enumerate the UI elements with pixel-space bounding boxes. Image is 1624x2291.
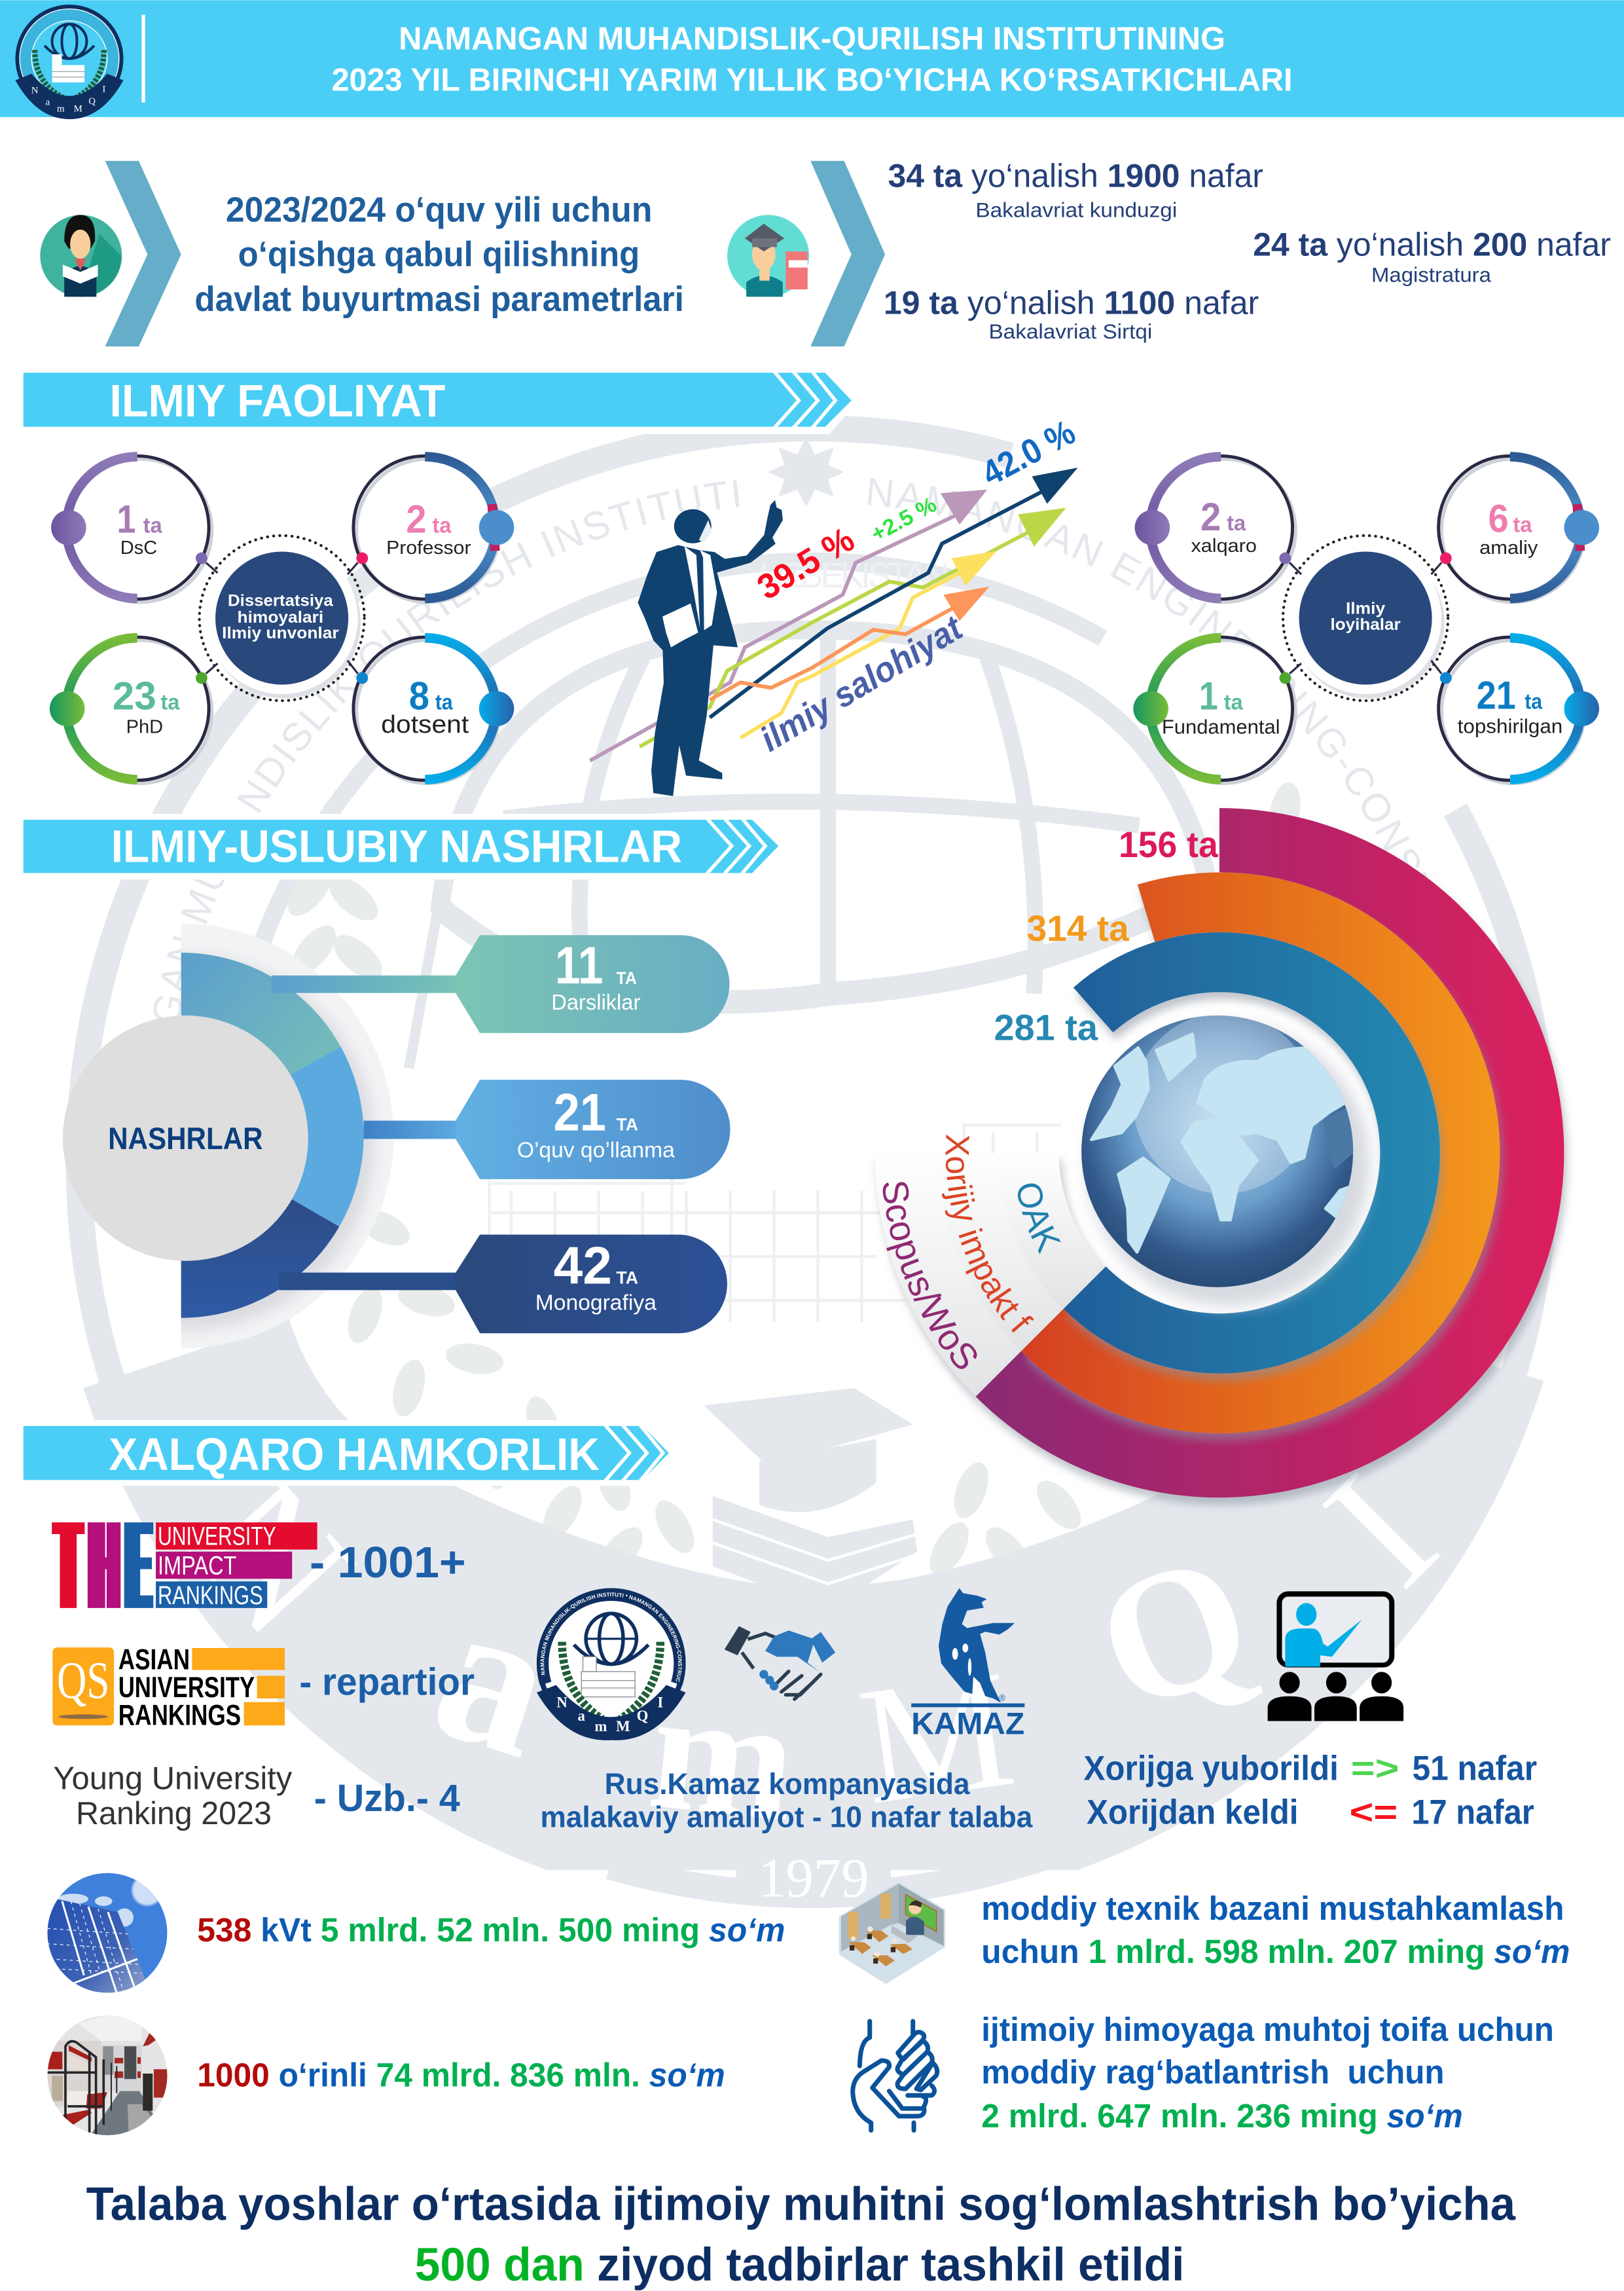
ring: dotsent: ta [435,691,453,715]
text: social support funding: ijtimoiy himoyaga muhtoj toifa uchun [981,2011,1554,2048]
photo: solar panel [46,1871,170,1997]
arc labels [882,1134,1061,1369]
ring: Professor [348,456,514,602]
logo: QS Asian rankings [52,1644,285,1731]
icon: presenter and audience [1268,1594,1403,1721]
ring: Xorijiy impakt [1021,872,1500,1433]
text: dormitory funding: 1000 o‘rinli 74 mlrd. 836 mln. so‘m [197,2056,725,2093]
text: social support funding: 2 mlrd. 647 mln. 236 ming so‘m [981,2097,1463,2135]
panel: growth chart with businessman [590,413,1081,796]
center disc: NASHRLAR: NASHRLAR [108,1122,263,1156]
logo: NamMQI emblem: I [657,1695,663,1711]
watermark: institute emblem: M [850,1635,1024,1840]
logo: NamMQI emblem: m [594,1718,607,1734]
value: repartior: - repartior [299,1660,475,1703]
ring: xalqaro [1135,456,1301,602]
ring: PhD: 23 [113,674,156,718]
header logo: Q [88,96,96,107]
ring: Professor: Professor [386,538,471,559]
hub: Ilmiy loyihalar: loyihalar [1331,616,1401,634]
header title: NAMANGAN MUHANDISLIK-QURILISH INSTITUTINING [399,21,1225,56]
section banner: XALQARO HAMKORLIK: XALQARO HAMKORLIK [109,1429,600,1480]
ring: Professor: 2 [406,496,426,541]
arc labels: Scopus/WoS [882,1182,977,1369]
pill: O'quv qo'llanma: TA [617,1114,638,1134]
label: 42.0 %: 42.0 % [976,413,1081,494]
logo: NamMQI emblem: NAMANGAN MUHANDISLIK-QURILISH INSTITUTI * NAMANGAN ENGINEERING-CONSTRUCTION INSTITUTE [541,1592,682,1682]
ring: PhD: PhD [126,716,163,737]
white disc [1059,992,1380,1313]
pill: O'quv qo'llanma: 21 [554,1083,606,1142]
text: solar funding: 538 kVt 5 mlrd. 52 mln. 500 ming so‘m [197,1911,785,1949]
section banner: ILMIY-USLUBIY NASHRLAR [18,814,785,879]
logo: NamMQI emblem: M [616,1718,630,1734]
ring: Fundamental: Fundamental [1162,716,1280,738]
hub: Dissertatsiya: Ilmiy unvonlar [222,625,339,642]
section banner: XALQARO HAMKORLIK [18,1420,676,1486]
text: material base funding: uchun 1 mlrd. 598 mln. 207 ming so‘m [981,1933,1570,1970]
ring: DsC: DsC [120,538,157,559]
center disc: NASHRLAR [63,1016,308,1261]
watermark: institute emblem: m [642,1652,804,1858]
ring: topshirilgan [1431,637,1599,783]
ring: dotsent [348,637,514,783]
ring: xalqaro: 2 [1200,494,1221,539]
value labels [994,824,1219,1048]
ring: Scopus/WoS [976,808,1564,1497]
text: exchange figures: Xorijdan keldi [1087,1793,1298,1831]
ring: amaliy: 6 [1489,496,1509,540]
panel: radial chart of publications [873,808,1572,1509]
header title: 2023 YIL BIRINCHI YARIM YILLIK BO‘YICHA KO‘RSATKICHLARI [331,63,1293,98]
ring segment: Monografiya [181,1135,339,1318]
pale label bands [875,1153,1106,1397]
ring: dotsent: dotsent [381,711,469,739]
admission heading: 2023/2024 o‘quv yili uchun [226,191,652,229]
watermark: institute emblem: UZBEKISTAN [759,557,949,595]
admission figures: Bakalavriat Sirtqi [988,320,1152,343]
icon: graduate [727,215,809,297]
ring: Fundamental [1133,637,1301,783]
admission figures: 19 ta yo‘nalish 1100 nafar [884,284,1259,321]
logo: THE impact rankings [52,1522,317,1610]
admission figures: Magistratura [1371,264,1492,287]
ring: dotsent: 8 [409,674,429,718]
section banner: ILMIY FAOLIYAT [18,367,859,434]
panel: scientific projects [1133,456,1599,783]
hub: Ilmiy loyihalar [1283,536,1448,701]
photo: dormitory room [46,2013,170,2139]
logo: THE impact rankings: IMPACT [158,1550,236,1580]
globe [1081,1012,1370,1306]
pill: Monografiya: 42 [554,1236,612,1295]
admission row [40,157,1611,346]
logo: THE impact rankings: RANKINGS [158,1581,263,1610]
text: exchange figures: 17 nafar [1411,1793,1534,1831]
section banner: ILMIY FAOLIYAT: ILMIY FAOLIYAT [109,375,445,426]
panel: dissertations and titles [50,456,514,783]
logo: KAMAZ: ® [999,1693,1005,1702]
text: Young University Ranking: Young University [53,1761,293,1797]
pill: Darsliklar: Darsliklar [551,991,640,1015]
admission figures: Bakalavriat kunduzgi [975,199,1177,222]
admission heading [194,191,684,319]
logo: QS Asian rankings: UNIVERSITY [118,1672,255,1704]
hub: Dissertatsiya [200,536,365,701]
hub: Ilmiy loyihalar: Ilmiy [1346,600,1386,617]
icon: student reading [40,215,122,297]
pill: O'quv qo'llanma: O’quv qo’llanma [517,1138,675,1162]
text: material base funding: moddiy texnik bazani mustahkamlash [981,1890,1564,1927]
footer statement [86,2178,1516,2291]
admission figures: 24 ta yo‘nalish 200 nafar [1253,227,1611,263]
header bar [0,0,1624,119]
businessman silhouette [638,500,783,796]
header logo: a [46,98,50,108]
text: Rus.Kamaz internship [541,1767,1033,1833]
admission heading: o‘qishga qabul qilishning [238,235,640,274]
ring: amaliy: ta [1513,513,1532,537]
hub: Dissertatsiya: Dissertatsiya [228,592,333,610]
ring segment: O'quv qo'llanma [181,1047,364,1226]
value: 1001+: - 1001+ [310,1538,466,1587]
ring: Fundamental: 1 [1199,674,1218,718]
text: Rus.Kamaz internship: malakaviy amaliyot - 10 nafar talaba [541,1800,1033,1833]
admission figures: 34 ta yo‘nalish 1900 nafar [888,157,1263,194]
ring: Professor: ta [432,513,452,538]
pill: Darsliklar: TA [617,968,637,988]
text: exchange figures [1083,1750,1537,1831]
logo: THE impact rankings: UNIVERSITY [158,1522,276,1551]
footer statement: 500 dan ziyod tadbirlar tashkil etildi [415,2239,1184,2291]
watermark: institute emblem: I [1288,1437,1473,1622]
arc labels: OAK [1018,1184,1061,1255]
logo: NamMQI emblem [537,1588,686,1740]
connector bars [272,976,459,1290]
watermark laurel leaves [280,780,1305,1583]
watermark building [489,1125,1125,1322]
admission figures [884,157,1611,343]
ring: Fundamental: ta [1224,691,1243,715]
ring: topshirilgan: ta [1525,689,1542,714]
text: material base funding [981,1890,1570,1970]
header logo: m [57,103,65,114]
logo: KAMAZ: KAMAZ [911,1707,1024,1741]
ring: PhD [50,637,217,783]
hub: Dissertatsiya: himoyalari [238,609,323,627]
text: Young University Ranking: Ranking 2023 [76,1796,272,1831]
watermark: institute emblem: NAMANGAN MUHANDISLIK-QURILISH INSTITUTI [153,479,740,1019]
header logo: M [74,103,82,114]
watermark: institute emblem: a [412,1554,579,1801]
logo: QS Asian rankings: RANKINGS [118,1699,241,1731]
ring: DsC: ta [143,513,162,538]
watermark: institute emblem: Q [1073,1512,1275,1751]
header title [331,21,1293,98]
pill: O'quv qo'llanma [456,1080,731,1179]
value: Uzb 4: - Uzb.- 4 [314,1777,460,1820]
value labels: 314 ta [1026,908,1130,949]
ring: amaliy: amaliy [1479,538,1538,559]
header logo [15,5,124,119]
label: +2.5 %: +2.5 % [867,492,941,547]
text: exchange figures: <= [1350,1793,1398,1831]
section banner: ILMIY-USLUBIY NASHRLAR: ILMIY-USLUBIY NASHRLAR [111,821,682,872]
ring: amaliy [1431,456,1599,602]
chevron 2 [810,161,885,346]
half-ring backdrop [181,923,393,1349]
logo: NamMQI emblem: N [556,1695,568,1711]
icon: classroom [839,1882,945,1984]
text: Rus.Kamaz internship: Rus.Kamaz kompanyasida [605,1767,970,1801]
ring: xalqaro: ta [1227,511,1246,536]
header logo: N [31,85,39,96]
text: exchange figures: 51 nafar [1412,1750,1537,1788]
pill: Darsliklar: 11 [555,936,603,995]
ring: DsC: 1 [117,496,135,541]
logo: QS Asian rankings: QS [57,1651,109,1710]
panel: publications [0,923,731,1349]
value labels: 156 ta [1119,824,1219,865]
text: exchange figures: => [1351,1750,1399,1788]
footer statement: Talaba yoshlar o‘rtasida ijtimoiy muhitni sog‘lomlashtrish bo’yicha [86,2178,1516,2230]
logo: QS Asian rankings: ASIAN [118,1644,190,1676]
text: exchange figures: Xorijga yuborildi [1083,1750,1339,1788]
ring segment: Darsliklar [181,953,341,1135]
ring: topshirilgan: 21 [1477,672,1516,717]
text: social support funding: moddiy rag‘batlantrish uchun [981,2053,1445,2091]
watermark: institute emblem: N [153,1440,391,1674]
logo: NamMQI emblem: a [578,1708,586,1724]
logo: NamMQI emblem: Q [637,1708,648,1724]
pill: Monografiya: TA [617,1268,638,1287]
pill: Darsliklar [456,935,729,1033]
chevron 1 [105,161,181,346]
ring: topshirilgan: topshirilgan [1458,716,1562,737]
chart lines [590,485,1055,761]
pill: Monografiya [456,1235,727,1333]
icon: handshake [725,1626,835,1699]
value labels: 281 ta [994,1007,1098,1048]
arrowheads [941,467,1078,621]
label: ilmiy salohiyat: ilmiy salohiyat [754,608,970,760]
icon: helping hands [853,2021,937,2131]
admission heading: davlat buyurtmasi parametrlari [194,280,684,319]
ring: OAK [1064,932,1440,1374]
pill: Monografiya: Monografiya [535,1291,657,1315]
label: 39.5 %: 39.5 % [751,520,861,608]
ring: DsC [51,456,217,602]
watermark books and mortarboard [704,1388,917,1610]
ring: xalqaro: xalqaro [1191,536,1257,557]
text: Young University Ranking [53,1761,293,1831]
header logo: I [102,84,105,95]
watermark: institute emblem: 1979 [758,1847,869,1909]
ring: PhD: ta [160,691,180,715]
logo: KAMAZ [911,1588,1024,1741]
text: social support funding [981,2011,1554,2135]
arc labels: Xorijiy impakt f [942,1134,1034,1333]
